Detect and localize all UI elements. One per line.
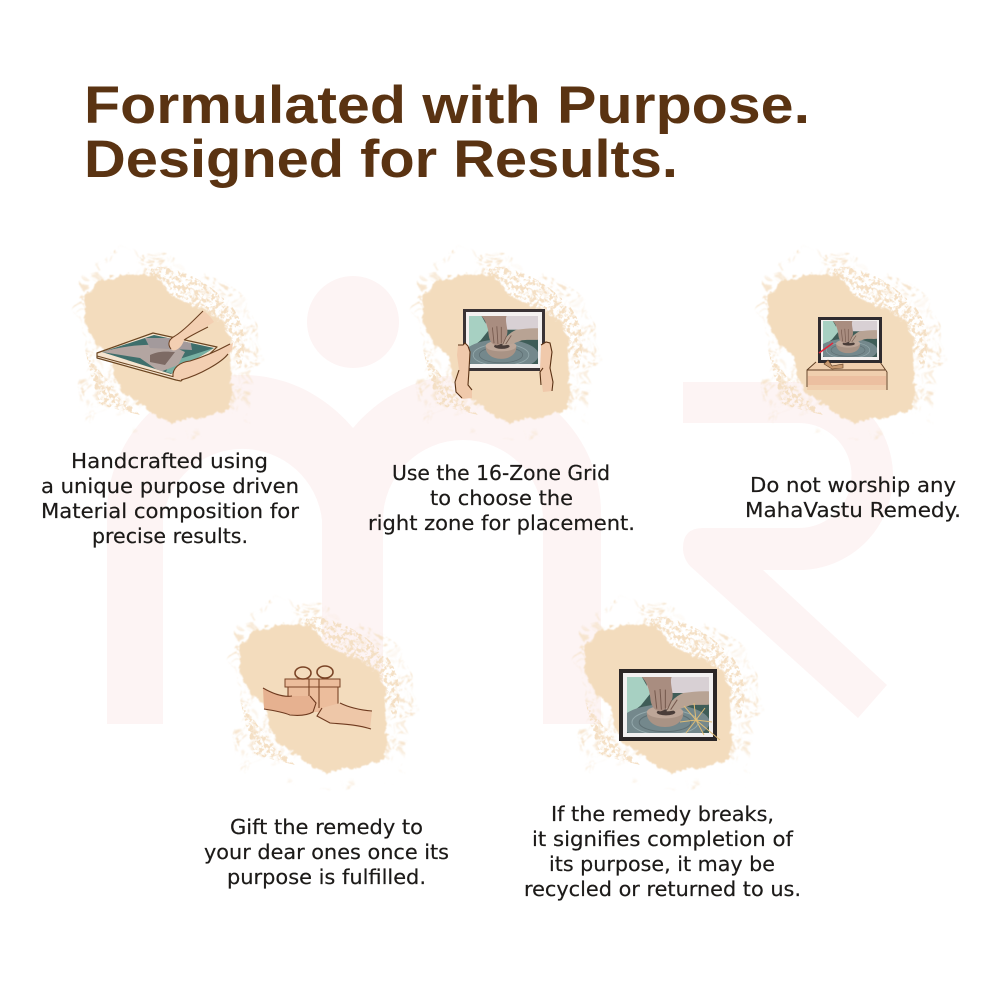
paint splash 1 — [77, 247, 264, 440]
panel: handcrafted — [41, 247, 300, 548]
icon: framed picture on a box — [807, 317, 887, 390]
title — [84, 76, 810, 189]
text: 16-zone grid — [368, 461, 635, 535]
text: 16-zone grid: to choose the — [430, 486, 573, 510]
text: handcrafted: Material composition for — [41, 499, 300, 523]
text: if the remedy breaks: its purpose, it may be — [549, 852, 775, 876]
paint splash 5 — [577, 597, 764, 790]
text: gift the remedy: Gift the remedy to — [230, 815, 423, 839]
text: handcrafted: Handcrafted using — [71, 449, 268, 473]
text: do not worship — [745, 473, 961, 522]
text: 16-zone grid: Use the 16-Zone Grid — [392, 461, 610, 485]
text: handcrafted: precise results. — [92, 524, 248, 548]
text: do not worship: Do not worship any — [750, 473, 956, 497]
text: gift the remedy: your dear ones once its — [204, 840, 449, 864]
title: Formulated with Purpose. — [84, 76, 810, 135]
panel: if the remedy breaks — [524, 597, 801, 901]
text: if the remedy breaks: If the remedy breaks, — [551, 802, 774, 826]
text: handcrafted — [41, 449, 300, 548]
icon: hands exchanging gift — [263, 666, 372, 729]
text: 16-zone grid: right zone for placement. — [368, 511, 635, 535]
panel: 16-zone grid — [368, 247, 635, 535]
icon: hands holding framed picture — [455, 309, 553, 399]
background logo watermark — [107, 276, 893, 724]
text: if the remedy breaks: it signifies completion of — [532, 827, 794, 851]
panel: do not worship — [745, 247, 961, 522]
text: handcrafted: a unique purpose driven — [41, 474, 299, 498]
icon: hands holding tilted frame — [95, 311, 233, 381]
text: if the remedy breaks — [524, 802, 801, 901]
icon: framed picture with crack — [619, 669, 720, 741]
title: Designed for Results. — [84, 130, 678, 189]
text: if the remedy breaks: recycled or returned to us. — [524, 877, 801, 901]
paint splash 2 — [415, 247, 602, 440]
paint splash 3 — [760, 247, 947, 440]
text: gift the remedy: purpose is fulfilled. — [227, 865, 426, 889]
text: gift the remedy — [204, 815, 449, 889]
text: do not worship: MahaVastu Remedy. — [745, 498, 961, 522]
panel: gift the remedy — [204, 597, 449, 889]
paint splash 4 — [232, 597, 419, 790]
